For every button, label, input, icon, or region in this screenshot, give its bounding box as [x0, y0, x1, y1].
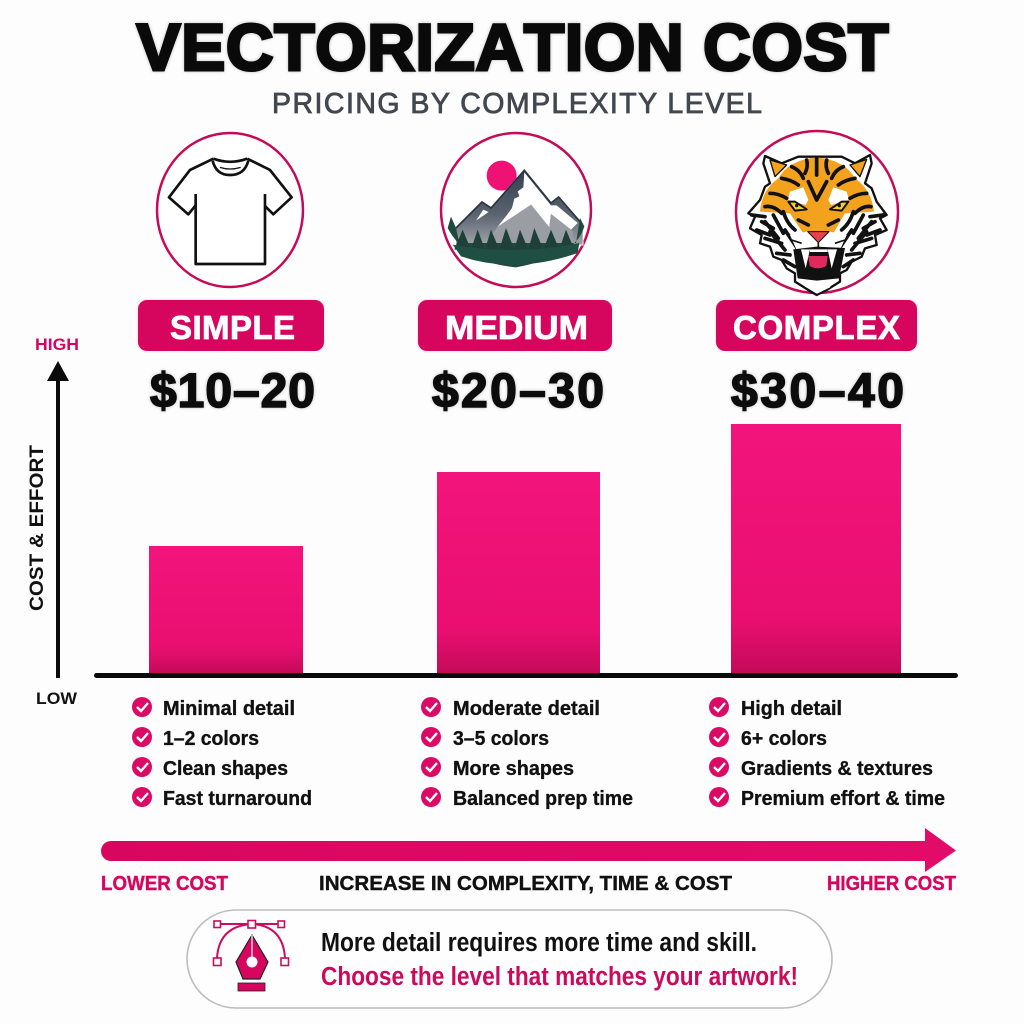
- feature list: medium: Balanced prep time: [453, 787, 633, 810]
- callout text line 1: More detail requires more time and skill.: [321, 929, 757, 957]
- feature list: medium: 3–5 colors: [453, 727, 549, 750]
- badge: simple: SIMPLE: [170, 309, 295, 346]
- tiger chin: [805, 281, 832, 293]
- bar: medium: [437, 472, 600, 675]
- tiger mouth: [793, 247, 845, 281]
- y axis label: low: LOW: [36, 690, 77, 708]
- sun: [487, 161, 517, 191]
- snow: [498, 172, 578, 230]
- cost arrow: [101, 828, 956, 872]
- icon: t-shirt in circle: [157, 133, 303, 287]
- feature list: complex: 6+ colors: [741, 727, 827, 750]
- tiger muzzle: [790, 232, 847, 250]
- feature list: simple: Minimal detail: [163, 697, 295, 720]
- feature list: complex: Gradients & textures: [741, 757, 933, 780]
- feature list: medium: More shapes: [453, 757, 574, 780]
- icon: pen tool: [214, 920, 288, 991]
- badge: simple: [138, 300, 324, 351]
- price: medium: $20–30: [432, 365, 604, 418]
- tiger white eye patches: [788, 187, 849, 205]
- subtitle: PRICING BY COMPLEXITY LEVEL: [272, 88, 762, 120]
- forest: [448, 217, 584, 267]
- feature list: simple: Clean shapes: [163, 757, 288, 780]
- feature list: medium: Moderate detail: [453, 697, 600, 720]
- feature list: simple: 1–2 colors: [163, 727, 259, 750]
- tiger nose: [808, 232, 829, 243]
- feature list: complex: Premium effort & time: [741, 787, 945, 810]
- icon: mountain in circle: [441, 133, 591, 287]
- badge: medium: [418, 300, 612, 351]
- badge: medium: MEDIUM: [445, 309, 588, 346]
- bar: simple: [149, 546, 303, 675]
- price: complex: $30–40: [731, 365, 904, 418]
- title: VECTORIZATION COST: [136, 10, 888, 84]
- tiger ears: [770, 159, 867, 177]
- bar chart: [94, 424, 958, 678]
- callout: [187, 910, 832, 1008]
- label: higher cost: HIGHER COST: [827, 872, 956, 895]
- feature list: simple: [132, 697, 312, 810]
- callout text line 2: Choose the level that matches your artwork!: [321, 963, 798, 991]
- bar: complex: [731, 424, 901, 675]
- mountain rock: [456, 170, 583, 245]
- feature list: complex: High detail: [741, 697, 842, 720]
- y axis label: high: HIGH: [35, 336, 79, 354]
- feature list: complex: [709, 697, 945, 810]
- badge: complex: [716, 300, 917, 351]
- tiger eyes: [788, 202, 848, 211]
- label: lower cost: LOWER COST: [101, 872, 228, 895]
- label: increase in complexity: INCREASE IN COMPLEXITY, TIME & COST: [319, 872, 732, 895]
- tiger mane: [748, 155, 887, 295]
- baseline: [94, 673, 958, 678]
- y axis label: cost and effort: COST & EFFORT: [27, 445, 48, 611]
- feature list: medium: [421, 697, 633, 810]
- y axis arrow: [47, 361, 69, 678]
- icon: tiger in circle: [736, 131, 898, 295]
- tiger orange head: [760, 157, 874, 233]
- tiger stripes: [752, 158, 883, 267]
- feature list: simple: Fast turnaround: [163, 787, 312, 810]
- price: simple: $10–20: [150, 365, 315, 418]
- badge: complex: COMPLEX: [733, 309, 900, 346]
